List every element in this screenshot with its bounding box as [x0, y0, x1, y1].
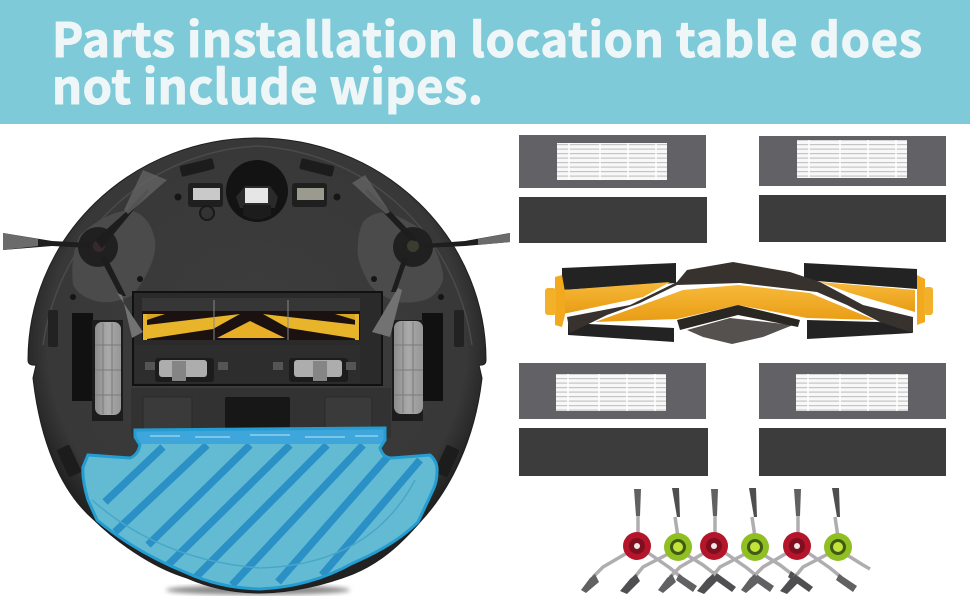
- title: [52, 2, 922, 118]
- main brush yellow: [147, 314, 240, 339]
- brush bay latches: [155, 358, 214, 382]
- foam filter: [519, 428, 708, 476]
- bottom bristles: [687, 318, 793, 344]
- robot body: [28, 138, 486, 593]
- top caster wheel: [226, 160, 288, 222]
- red brush 3: [741, 489, 857, 593]
- red brush 1: [581, 489, 697, 593]
- cliff sensors: [174, 158, 340, 220]
- HEPA filter: [759, 363, 946, 419]
- main roller brush: [545, 262, 933, 344]
- foam filter: [759, 428, 946, 476]
- filter set 4: [759, 363, 946, 476]
- HEPA filter: [519, 363, 706, 419]
- filter set 2: [759, 136, 946, 242]
- HEPA filter: [759, 136, 946, 186]
- lower panels: [131, 388, 391, 438]
- foam filter: [759, 195, 946, 242]
- center yellow section: [595, 285, 875, 322]
- right wheel: [394, 321, 423, 414]
- green brush 2: [697, 488, 813, 594]
- wheel wells: [72, 313, 93, 401]
- green brush 3: [780, 488, 870, 594]
- edge sensors: [56, 444, 82, 478]
- green brush 1: [620, 488, 736, 594]
- black rubber blades: [562, 263, 676, 290]
- top bristles: [567, 262, 913, 333]
- title: not include wipes.: [52, 49, 483, 118]
- side yellow sections: [563, 282, 670, 314]
- main brush bay: [133, 292, 382, 385]
- side brushes row: [581, 488, 870, 594]
- right side brush: [352, 175, 510, 337]
- title: Parts installation location table does: [52, 2, 922, 71]
- HEPA filter: [519, 135, 706, 188]
- side brush wells: [72, 210, 155, 302]
- header banner: [0, 0, 970, 124]
- red brush 2: [658, 489, 774, 593]
- left wheel: [95, 322, 121, 415]
- end caps: [555, 275, 565, 327]
- filter set 1: [519, 135, 707, 243]
- left side brush: [3, 170, 167, 338]
- mopping pad: [83, 428, 437, 589]
- floor shadow: [166, 585, 350, 595]
- filter set 3: [519, 363, 708, 476]
- robot vacuum underside: [3, 138, 510, 595]
- foam filter: [519, 197, 707, 243]
